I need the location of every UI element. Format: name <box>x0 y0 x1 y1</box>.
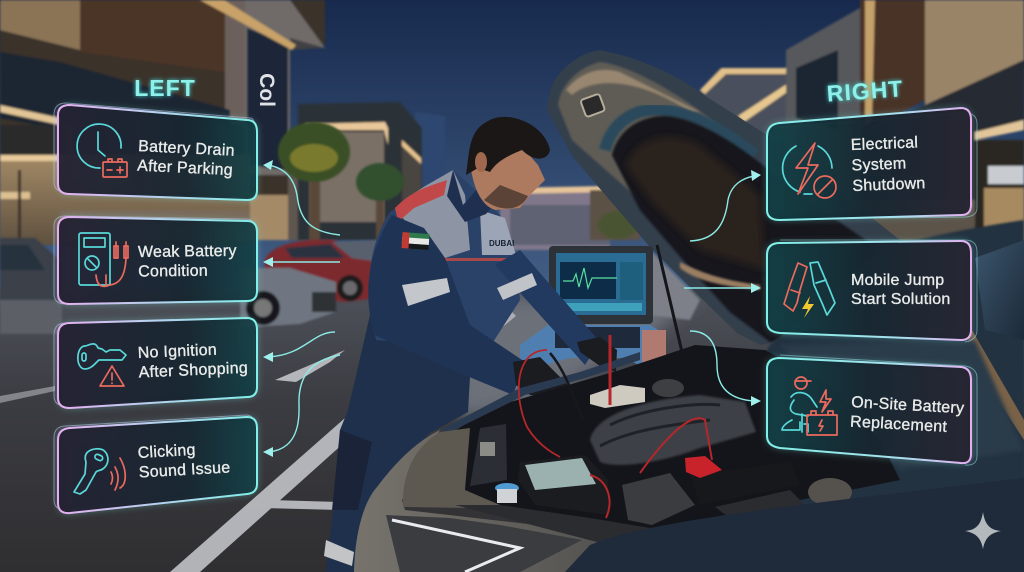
windscreen and right car body <box>640 220 1024 572</box>
second battery <box>690 462 800 505</box>
label: Weak Battery <box>138 243 237 261</box>
panel: electrical system shutdown <box>767 108 977 220</box>
plastic box <box>622 473 695 525</box>
near arm <box>368 215 525 395</box>
coolant tank <box>590 385 645 408</box>
heading: left: LEFT <box>134 75 196 101</box>
icon: multimeter with leads <box>79 233 128 286</box>
icon: key with sound waves <box>74 449 125 494</box>
label: Battery Drain <box>138 138 235 160</box>
latch <box>580 94 605 117</box>
hood of the car, open <box>547 50 900 365</box>
parking lines <box>0 312 516 572</box>
label: Condition <box>138 263 208 280</box>
cart <box>520 325 666 372</box>
heading: right: RIGHT <box>826 75 904 107</box>
asphalt ground <box>0 290 1024 572</box>
arrow: to battery replacement <box>690 331 761 406</box>
heading: right: RIGHT <box>826 75 904 107</box>
inner fender panel <box>403 428 500 508</box>
dark interior <box>612 116 880 342</box>
icon: bolt with prohibited sign <box>783 143 836 198</box>
headlight <box>386 515 582 572</box>
flag patch <box>401 232 430 250</box>
chest badge: DUBAI <box>489 239 514 248</box>
test leads <box>519 350 560 457</box>
bay rim strip <box>440 352 640 432</box>
arrow: to weak battery <box>263 257 340 267</box>
gloves <box>513 357 573 398</box>
arrow: to electrical shutdown <box>690 170 761 241</box>
diagnostic monitor on cart <box>520 246 666 372</box>
label: Replacement <box>850 413 948 436</box>
label: On-Site Battery <box>851 394 965 417</box>
monitor <box>549 246 653 324</box>
palm trees <box>278 122 638 250</box>
sign on left building: Col <box>255 73 278 107</box>
car front with engine bay <box>354 220 1024 572</box>
label: After Shopping <box>138 360 248 381</box>
label: Shutdown <box>852 175 926 195</box>
panel: on-site battery replacement <box>767 355 977 465</box>
legs and torso <box>326 315 505 572</box>
label: Electrical <box>851 134 919 154</box>
icon: clock with battery <box>77 124 127 177</box>
arrow: to clicking sound <box>263 355 340 457</box>
panel: weak battery condition <box>54 216 257 304</box>
label: Clicking <box>137 442 196 462</box>
fuse box <box>470 424 507 486</box>
label: Mobile Jump <box>851 272 944 289</box>
tan strip at lower hood <box>680 262 760 290</box>
icon: technician with battery <box>782 377 837 435</box>
label: After Parking <box>137 157 233 179</box>
panel: clicking sound issue <box>54 415 257 513</box>
heading: left: LEFT <box>134 75 196 101</box>
label: System <box>851 155 907 174</box>
mechanic <box>324 117 617 572</box>
arrow: to jump start <box>684 283 761 293</box>
label: Sound Issue <box>138 459 231 481</box>
arrow: to no ignition <box>263 332 335 362</box>
panel: mobile jump start solution <box>767 240 977 342</box>
label: No Ignition <box>137 342 217 362</box>
hood front lip <box>455 505 650 548</box>
gemini sparkle mark <box>965 512 1001 549</box>
centre background buildings <box>298 102 640 250</box>
panel: no ignition after shopping <box>54 318 257 408</box>
icon: key with warning <box>78 344 126 386</box>
engine bay <box>408 345 900 530</box>
hood outer shell <box>547 50 900 345</box>
left mall building <box>0 0 325 245</box>
arrow: to battery drain <box>263 160 340 235</box>
front hood panel <box>565 478 1024 572</box>
lit asphalt patch <box>400 295 700 420</box>
fender <box>354 430 640 572</box>
label: Start Solution <box>851 291 951 308</box>
battery <box>518 455 608 515</box>
far arm <box>495 250 600 365</box>
hood strut <box>657 245 685 365</box>
blue rib <box>605 110 755 155</box>
engine cover <box>590 395 756 465</box>
panel: battery drain after parking <box>54 103 257 200</box>
right mall buildings <box>700 0 1024 255</box>
icon: jumper clamps <box>784 262 835 318</box>
parked cars, left <box>0 238 700 334</box>
red jump clamp <box>685 456 722 478</box>
tan inner panel <box>558 62 750 200</box>
head <box>470 140 545 210</box>
